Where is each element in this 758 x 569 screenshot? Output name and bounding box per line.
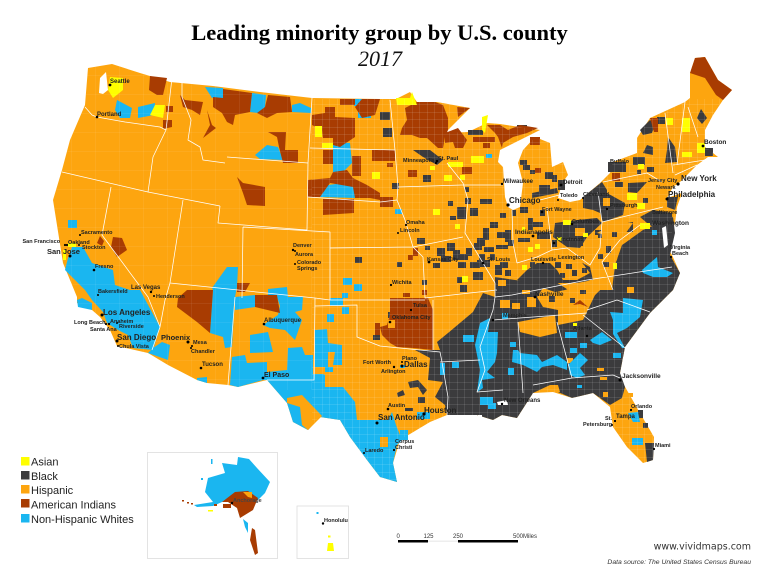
east city names: Fort Wayne [542, 207, 572, 213]
east city names: Orlando [631, 404, 653, 410]
west city names: El Paso [264, 372, 289, 379]
east city names: Beach [672, 251, 689, 257]
central city names: Arlington [381, 369, 406, 375]
scale bar: 0 [396, 534, 400, 540]
central city names: St. Paul [438, 156, 459, 162]
county boundary lines [54, 66, 720, 480]
American Indian counties [97, 57, 732, 350]
central city names: Corpus [395, 439, 414, 445]
central city names: Omaha [406, 220, 426, 226]
scale bar: 125 [424, 534, 434, 540]
east city names: Miami [655, 443, 671, 449]
central city names: Fort Worth [363, 360, 392, 366]
Hawaii inset: Honolulu [324, 518, 348, 524]
central city names [363, 156, 459, 454]
west city names: Sacramento [81, 230, 113, 236]
west city names: Bakersfield [98, 289, 128, 295]
west city names: Las Vegas [131, 285, 161, 291]
west city names: Santa Ana [90, 327, 118, 333]
central city names: Wichita [392, 280, 412, 286]
east city names: Memphis [503, 313, 527, 319]
website credit: www.vividmaps.com [654, 542, 751, 552]
central city names: Houston [424, 406, 457, 415]
east city names: New York [681, 174, 717, 183]
west city names: Stockton [82, 245, 106, 251]
city dots [64, 84, 704, 454]
west city names: Chula Vista [119, 344, 150, 350]
west city names: Oakland [68, 240, 90, 246]
east city names: Atlanta [573, 326, 593, 332]
west city names: Denver [293, 243, 313, 249]
west city names [22, 79, 322, 379]
east city names: Pittsburgh [610, 203, 638, 209]
east city names: Lexington [558, 255, 585, 261]
central city names: San Antonio [378, 413, 425, 422]
legend [21, 456, 134, 526]
Hispanic pockets inside the South and East [498, 198, 634, 397]
west city names: San Diego [117, 333, 156, 342]
east city names: St. Louis [487, 257, 510, 263]
east city names: Milwaukee [503, 179, 534, 185]
west city names: Albuquerque [264, 318, 302, 324]
west city names: Los Angeles [103, 308, 151, 317]
east city names: Tampa [616, 414, 636, 420]
east city names: Baltimore [652, 210, 677, 216]
west city names: Anaheim [110, 319, 133, 325]
central city names: Tulsa [413, 303, 428, 309]
west city names: Colorado [297, 260, 322, 266]
Black county clusters within Kentucky and West Virginia [530, 232, 617, 303]
east city names: Chicago [509, 196, 541, 205]
central city names: Christi [395, 445, 413, 451]
Non-Hispanic White counties [65, 87, 673, 482]
central city names: Dallas [404, 360, 428, 369]
central city names: Austin [388, 403, 406, 409]
east city names: Buffalo [610, 159, 630, 165]
east city names: Jacksonville [622, 373, 661, 380]
Asian counties [63, 77, 705, 326]
central city names: Oklahoma City [392, 315, 431, 321]
east city names: Virginia [670, 245, 691, 251]
east city names: Newark [656, 185, 677, 191]
lakes and bays in white [99, 72, 668, 418]
east city names: Detroit [563, 180, 582, 186]
Alaska inset [148, 452, 278, 558]
west city names: Mesa [193, 340, 208, 346]
west city names: Fresno [95, 264, 114, 270]
west city names: Springs [297, 266, 317, 272]
scale bar: 500Miles [513, 534, 537, 540]
scale bar [396, 534, 537, 542]
west city names: Seattle [110, 79, 130, 85]
central city names: Kansas City [427, 257, 459, 263]
east city names: Cincinnati [557, 237, 584, 243]
east city names: Boston [704, 139, 726, 146]
state boundary lines [62, 78, 705, 415]
east city names: Petersburg [583, 422, 612, 428]
east city names: Louisville [531, 257, 556, 263]
west city names: Henderson [156, 294, 185, 300]
west city names: Phoenix [161, 333, 191, 342]
west city names: San Jose [47, 247, 80, 256]
subtitle: year: 2017 [358, 46, 403, 71]
legend: Non-Hispanic Whites: Non-Hispanic Whites [31, 514, 134, 526]
legend: Black: Black [31, 471, 58, 483]
west city names: San Francisco [22, 239, 61, 245]
Hispanic pocket in Oklahoma [388, 320, 395, 328]
Hispanic pockets inside Texas [287, 367, 388, 447]
east city names: Cleveland [583, 192, 609, 198]
east city names: Nashville [535, 291, 564, 298]
east city names: Washington [652, 220, 689, 227]
central city names: Lincoln [400, 228, 420, 234]
east city names: St. [605, 416, 612, 422]
title: Leading minority group by U.S. county [191, 20, 569, 45]
east city names: Indianapolis [515, 229, 553, 236]
west city names: Chandler [191, 349, 216, 355]
east city names: Columbus [572, 219, 599, 225]
scale bar: 250 [453, 534, 464, 540]
map of the contiguous United States [22, 57, 752, 499]
Black-majority-minority counties [355, 109, 713, 462]
Hawaii inset [297, 506, 348, 558]
Hispanic base area [53, 57, 732, 482]
central city names: Laredo [365, 448, 384, 454]
legend: Asian: Asian [31, 456, 59, 468]
legend: American Indians: American Indians [31, 500, 116, 512]
east city names: Jersey City [648, 178, 678, 184]
west city names: Aurora [295, 252, 314, 258]
central city names: Minneapolis [403, 158, 435, 164]
west city names: Portland [97, 112, 122, 118]
east city names [487, 139, 726, 449]
east city names: New Orleans [504, 398, 541, 404]
legend: Hispanic: Hispanic [31, 485, 74, 497]
east city names: Toledo [560, 193, 578, 199]
central city names: Plano [402, 356, 418, 362]
Alaska inset: Anchorage [233, 498, 262, 504]
data source: Data source: The United States Census Bureau [607, 559, 751, 566]
east city names: Philadelphia [668, 190, 716, 199]
west city names: Riverside [119, 324, 144, 330]
city labels [22, 79, 726, 454]
west city names: Tucson [202, 362, 223, 368]
west city names: Long Beach [74, 320, 106, 326]
